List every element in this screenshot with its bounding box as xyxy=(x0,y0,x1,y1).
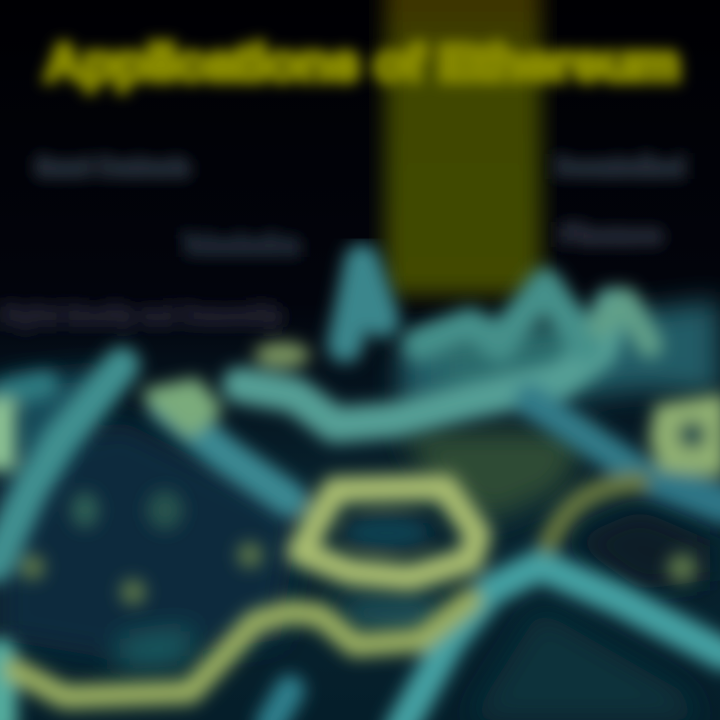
highlight node: top left xyxy=(150,385,215,430)
label: middle right: Finance xyxy=(560,219,662,250)
teal network strokes xyxy=(0,262,720,720)
label: lower left: Digital Identity and Ownership xyxy=(0,299,282,330)
dark basin fills xyxy=(0,300,720,720)
highlight node: top centre xyxy=(254,342,310,368)
yellow line xyxy=(15,600,470,697)
right hexagon xyxy=(655,400,720,470)
label: top left: Smart Contracts xyxy=(35,151,190,182)
olive arc xyxy=(548,482,640,545)
central hexagon core xyxy=(345,516,429,550)
central hexagon xyxy=(300,487,478,578)
network illustration xyxy=(0,262,720,720)
yellow light column xyxy=(385,0,541,295)
small dots xyxy=(19,490,697,605)
title: Applications of Ethereum xyxy=(45,35,680,91)
left edge node xyxy=(0,400,15,470)
label: middle left: Tokenization xyxy=(182,229,300,260)
